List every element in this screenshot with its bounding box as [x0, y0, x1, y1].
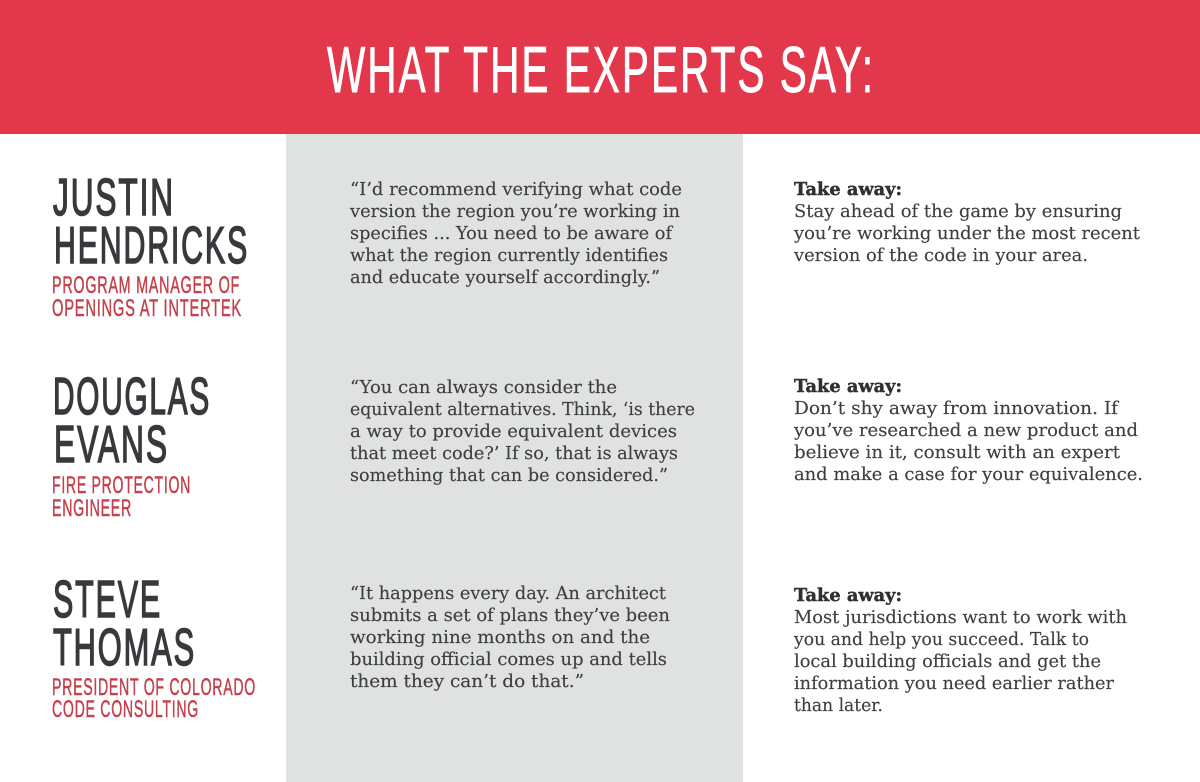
takeaway 3: information you need earlier rather — [794, 673, 1114, 694]
expert 3: Steve Thomas: STEVE — [53, 571, 162, 629]
expert 1: Justin Hendricks: HENDRICKS — [54, 217, 249, 275]
quote 3: submits a set of plans they’ve been — [350, 605, 670, 626]
quote 3: building official comes up and tells — [350, 649, 667, 670]
quote 2 — [350, 377, 695, 486]
expert 2: Douglas Evans: FIRE PROTECTION — [52, 472, 191, 499]
takeaway 1: Stay ahead of the game by ensuring — [794, 201, 1122, 222]
expert 2: Douglas Evans: EVANS — [54, 416, 169, 474]
quote 3 — [350, 583, 670, 692]
expert 1: Justin Hendricks: JUSTIN — [53, 169, 175, 227]
expert 1: Justin Hendricks: PROGRAM MANAGER OF — [52, 272, 240, 299]
panel: quotes column background — [286, 134, 743, 782]
takeaway 2: believe in it, consult with an expert — [794, 442, 1121, 463]
takeaway 2: Don’t shy away from innovation. If — [794, 398, 1119, 419]
takeaway 3: you and help you succeed. Talk to — [793, 629, 1089, 650]
quote 2: “You can always consider the — [350, 377, 617, 398]
quote 3: working nine months on and the — [350, 627, 650, 648]
quote 1: specifies ... You need to be aware of — [350, 223, 673, 244]
takeaway 2 — [793, 376, 1143, 485]
takeaway 1: Take away: — [794, 179, 902, 200]
quote 1: version the region you’re working in — [349, 201, 680, 222]
takeaway 2: Take away: — [794, 376, 902, 397]
expert 2: Douglas Evans: ENGINEER — [52, 495, 132, 522]
takeaway 2: you’ve researched a new product and — [793, 420, 1138, 441]
takeaway 1 — [793, 179, 1141, 266]
expert 1: Justin Hendricks: OPENINGS AT INTERTEK — [52, 295, 242, 322]
quote 2: that meet code?’ If so, that is always — [350, 443, 678, 464]
quote 1: “I’d recommend verifying what code — [350, 179, 682, 200]
takeaway 3: Take away: — [794, 585, 902, 606]
takeaway 1: you’re working under the most recent — [793, 223, 1141, 244]
expert 2: Douglas Evans — [52, 368, 211, 522]
quote 2: something that can be considered.” — [350, 465, 668, 486]
quote 1 — [349, 179, 682, 288]
takeaway 3: local building officials and get the — [794, 651, 1101, 672]
takeaway 3: Most jurisdictions want to work with — [794, 607, 1127, 628]
quote 2: equivalent alternatives. Think, ‘is there — [350, 399, 695, 420]
header banner — [0, 0, 1200, 134]
quote 1: and educate yourself accordingly.” — [350, 267, 660, 288]
quote 3: them they can’t do that.” — [350, 671, 584, 692]
expert 3: Steve Thomas: THOMAS — [53, 619, 196, 677]
takeaway 3 — [793, 585, 1127, 716]
expert 3: Steve Thomas — [52, 571, 256, 723]
expert 2: Douglas Evans: DOUGLAS — [53, 368, 211, 426]
expert 1: Justin Hendricks — [52, 169, 249, 322]
takeaway 2: and make a case for your equivalence. — [794, 464, 1143, 485]
quote 3: “It happens every day. An architect — [350, 583, 667, 604]
quote 1: what the region currently identifies — [350, 245, 668, 266]
quote 2: a way to provide equivalent devices — [350, 421, 677, 442]
expert 3: Steve Thomas: PRESIDENT OF COLORADO — [52, 674, 256, 701]
expert 3: Steve Thomas: CODE CONSULTING — [52, 696, 199, 723]
takeaway 3: than later. — [794, 695, 883, 716]
takeaway 1: version of the code in your area. — [793, 245, 1088, 266]
title: WHAT THE EXPERTS SAY: — [327, 33, 875, 106]
